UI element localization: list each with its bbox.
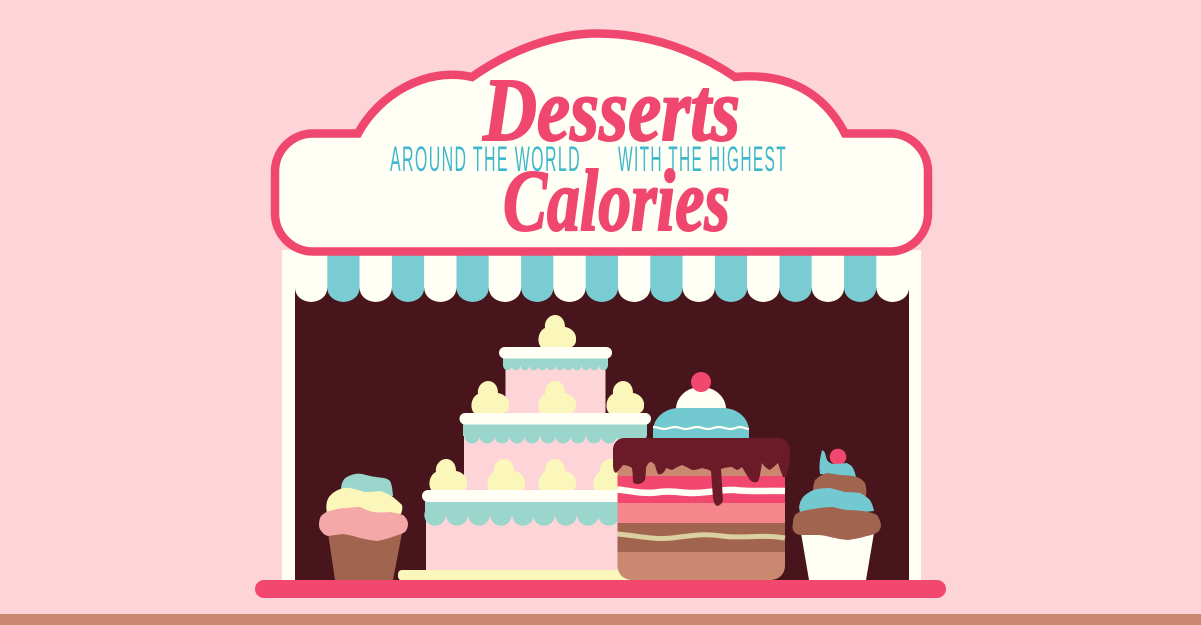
cup: [328, 533, 402, 580]
tiered cake: [398, 315, 652, 580]
shelf: [255, 580, 946, 598]
title: Desserts: Desserts: [482, 61, 740, 160]
beige wavy line: [618, 534, 785, 539]
brown frosting: [792, 507, 881, 540]
tier white bars: [422, 347, 652, 502]
brown frosting top: [813, 473, 866, 496]
sign board: [275, 34, 928, 252]
pink frosting: [319, 507, 408, 541]
teal frosting: [341, 474, 393, 496]
tier pink bodies: [426, 366, 634, 570]
macaron with cherry: [653, 372, 749, 438]
shop interior: [295, 288, 909, 582]
cake base plate: [398, 570, 638, 580]
left cupcake: [319, 474, 408, 580]
tier teal frostings: [424, 356, 647, 526]
top teal swirl: [820, 450, 856, 477]
chocolate icing: [613, 438, 790, 506]
cherry: [830, 449, 846, 465]
awning: [295, 250, 909, 302]
teal frosting: [799, 488, 874, 513]
right cupcake: [792, 449, 881, 580]
cup: [801, 533, 874, 580]
title: Calories: Calories: [503, 153, 730, 250]
cake body: [618, 460, 785, 580]
layer cake: [613, 438, 790, 580]
ground strip: [0, 614, 1201, 625]
shop building: [282, 250, 921, 582]
yellow frosting: [326, 488, 402, 514]
white wavy line: [618, 490, 785, 493]
cream dollops: [429, 315, 644, 492]
illustration: dessert shop: AROUND THE WORLD: [390, 140, 581, 179]
illustration: dessert shop: WITH THE HIGHEST: [618, 140, 787, 179]
